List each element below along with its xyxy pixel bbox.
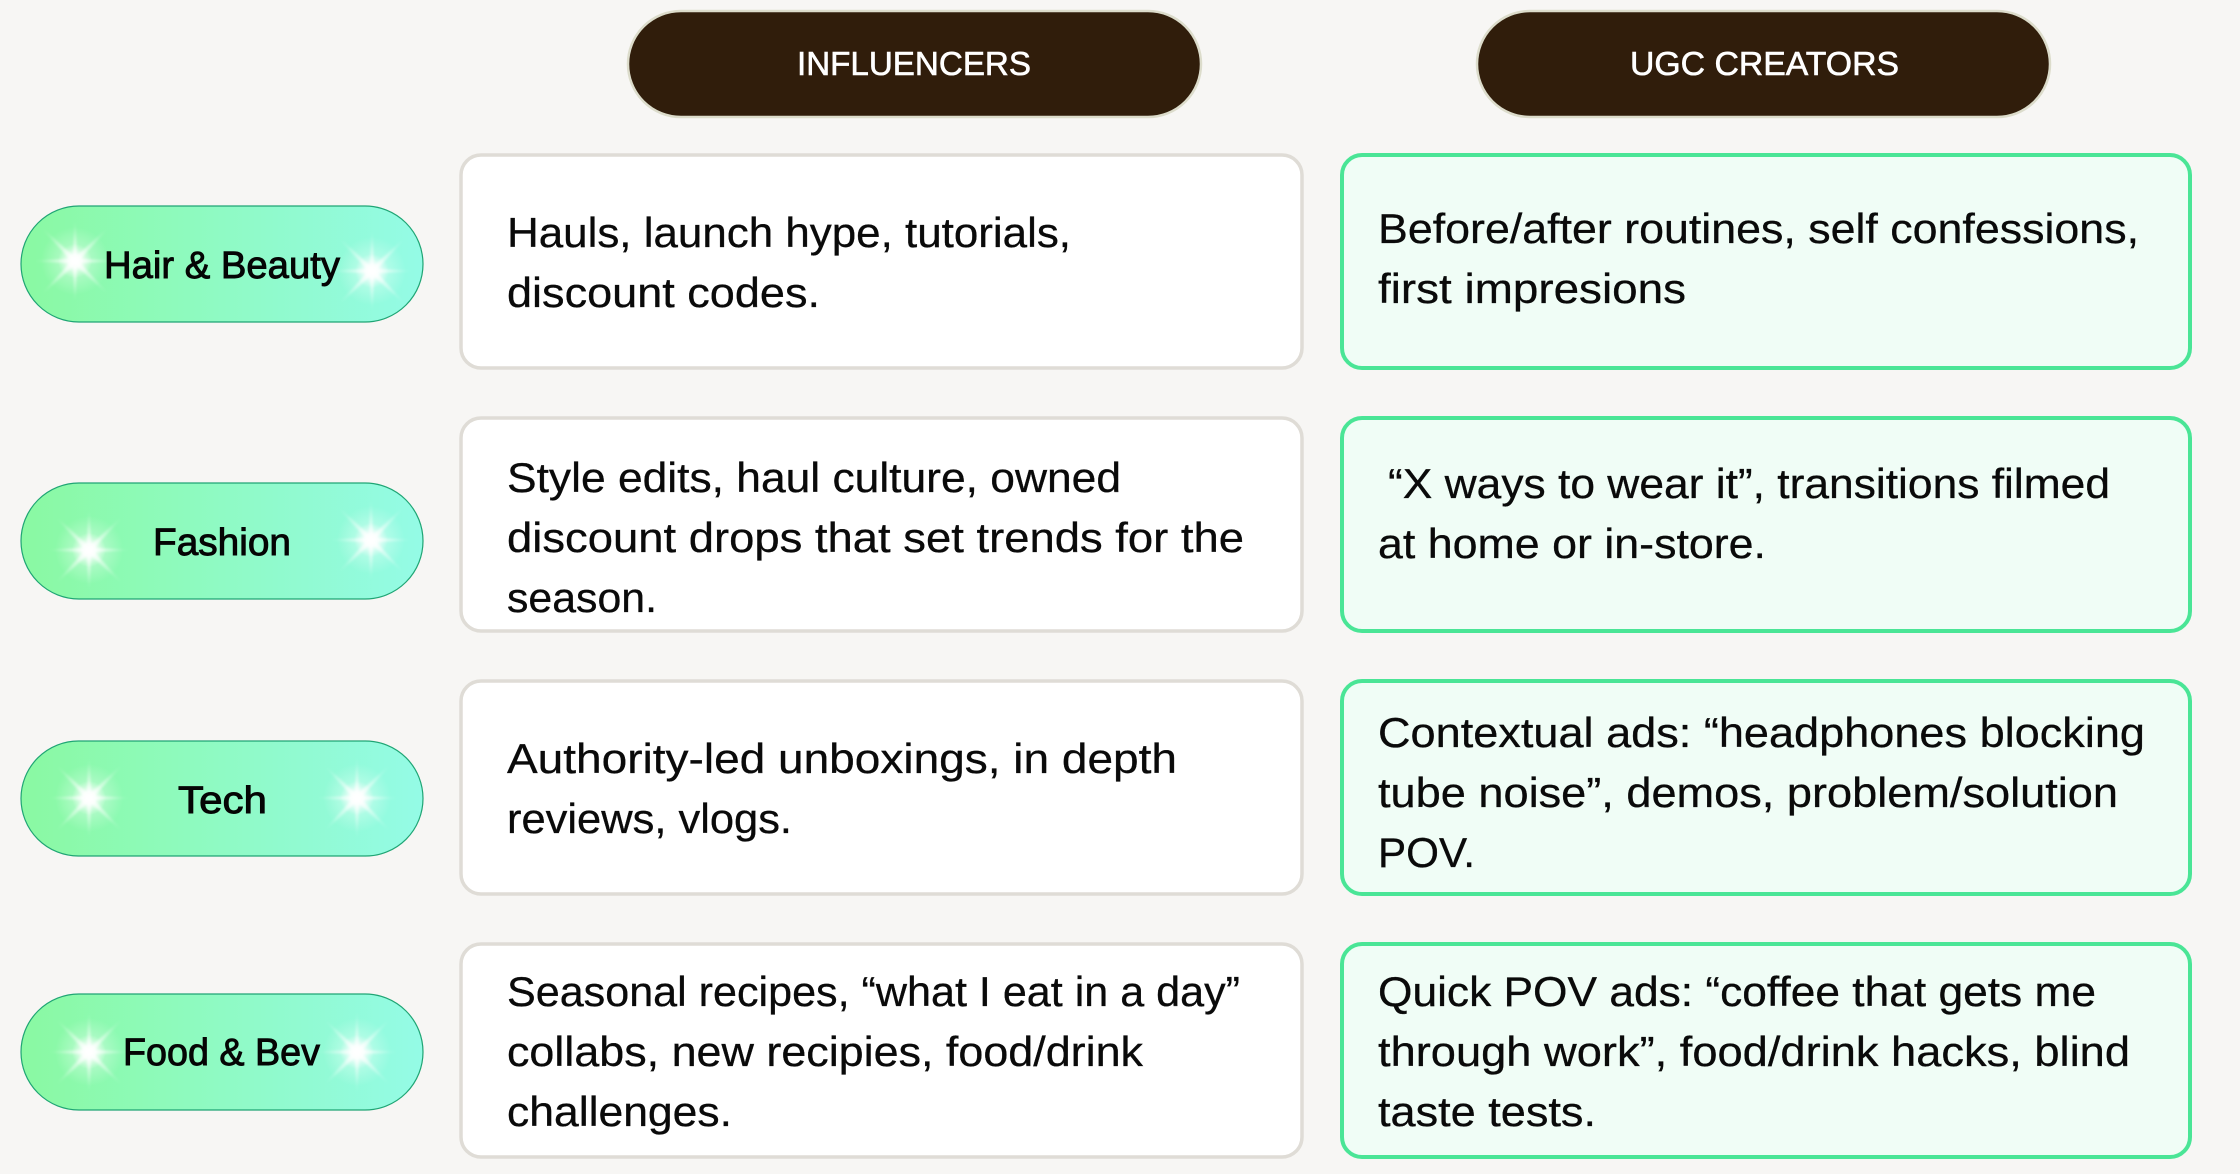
row label: hair and beauty <box>21 206 423 322</box>
ugc card: fashion <box>1342 418 2190 631</box>
row label: tech <box>21 741 423 856</box>
column header: ugc creators: UGC CREATORS <box>1630 45 1899 82</box>
ugc card: food and bev <box>1342 944 2190 1157</box>
ugc card: tech: POV. <box>1378 829 1475 876</box>
ugc card: food and bev: through work”, food/drink hacks, blind <box>1378 1028 2130 1075</box>
influencers card: tech: reviews, vlogs. <box>507 795 792 842</box>
ugc card: food and bev: Quick POV ads: “coffee that gets me <box>1378 968 2096 1015</box>
row label: fashion <box>21 483 423 599</box>
influencers card: fashion <box>461 418 1302 631</box>
ugc card: hair and beauty: first impresions <box>1378 265 1686 312</box>
influencers card: tech: Authority-led unboxings, in depth <box>507 735 1177 782</box>
row label: fashion: Fashion <box>153 522 291 564</box>
column header: influencers: INFLUENCERS <box>797 45 1031 82</box>
column header: ugc creators <box>1477 11 2050 117</box>
influencers card: hair and beauty: Hauls, launch hype, tutorials, <box>507 209 1071 256</box>
ugc card: tech: tube noise”, demos, problem/solution <box>1378 769 2118 816</box>
ugc card: tech: Contextual ads: “headphones blocking <box>1378 709 2145 756</box>
row label: tech: Tech <box>178 780 267 822</box>
influencers card: fashion: discount drops that set trends for the <box>507 514 1244 561</box>
row label: food and bev: Food & Bev <box>123 1032 320 1074</box>
ugc card: food and bev: taste tests. <box>1378 1088 1596 1135</box>
ugc card: fashion: at home or in-store. <box>1378 520 1766 567</box>
ugc card: tech <box>1342 681 2190 894</box>
influencers card: hair and beauty <box>461 155 1302 368</box>
influencers card: food and bev: challenges. <box>507 1088 732 1135</box>
row label: food and bev <box>21 994 423 1110</box>
influencers card: tech <box>461 681 1302 894</box>
ugc card: hair and beauty: Before/after routines, self confessions, <box>1378 205 2139 252</box>
influencers card: fashion: Style edits, haul culture, owned <box>507 454 1121 501</box>
influencers card: food and bev <box>461 944 1302 1157</box>
row label: hair and beauty: Hair & Beauty <box>104 245 340 287</box>
influencers card: hair and beauty: discount codes. <box>507 269 820 316</box>
influencers card: fashion: season. <box>507 574 657 621</box>
ugc card: hair and beauty <box>1342 155 2190 368</box>
influencers card: food and bev: Seasonal recipes, “what I eat in a day” <box>507 968 1240 1015</box>
ugc card: fashion: “X ways to wear it”, transitions filmed <box>1388 460 2110 507</box>
influencers card: food and bev: collabs, new recipies, food/drink <box>507 1028 1144 1075</box>
column header: influencers <box>628 11 1201 117</box>
